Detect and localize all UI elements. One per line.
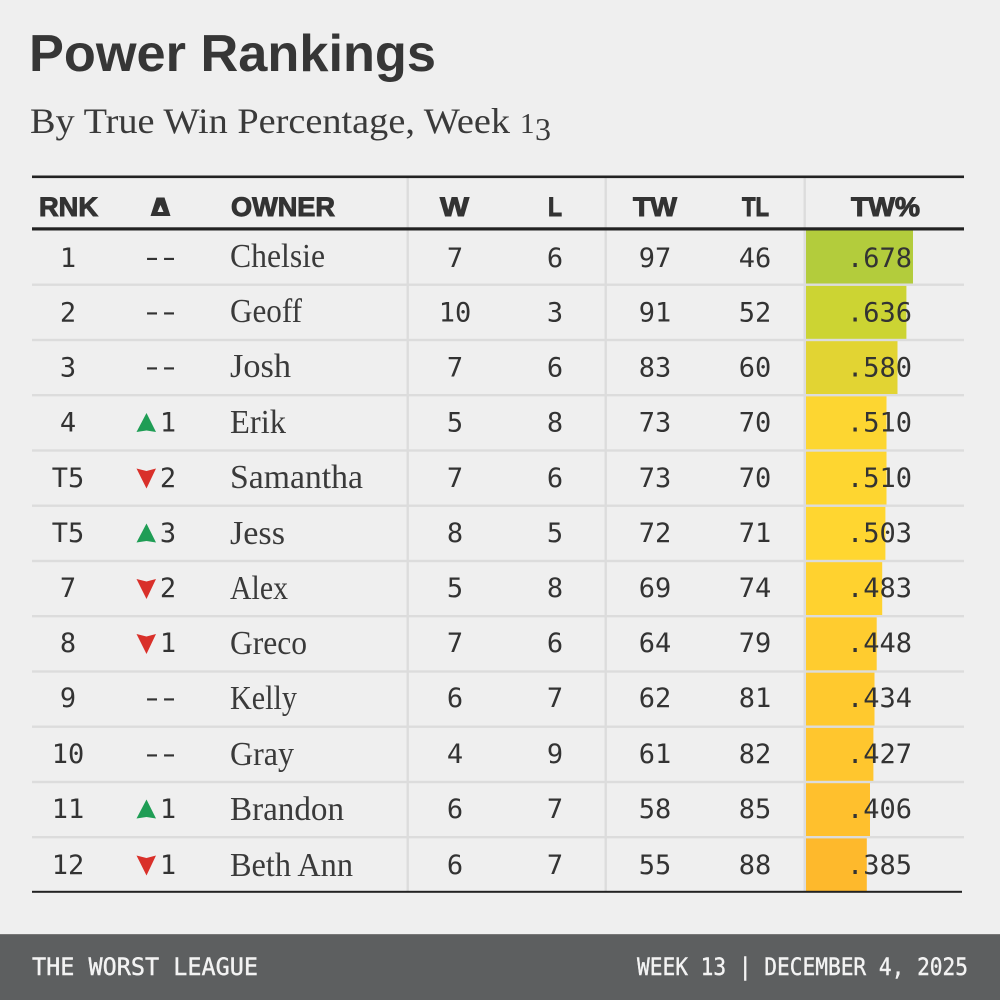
true win percentage column: .427 <box>847 739 912 770</box>
rank column: T5 <box>52 518 84 549</box>
true wins column: 69 <box>639 573 671 604</box>
wins column: 8 <box>447 518 463 549</box>
true wins column: 73 <box>639 408 671 438</box>
change column: 1 <box>160 850 176 881</box>
true wins column: 61 <box>639 739 671 770</box>
title: Power Rankings <box>29 25 436 83</box>
true losses column: 70 <box>739 408 771 438</box>
table header: TL <box>742 192 769 222</box>
true win percentage column: .406 <box>847 794 912 825</box>
wins column: 7 <box>447 352 463 384</box>
rank column: 10 <box>52 739 84 770</box>
change column: -- <box>140 738 175 769</box>
rank column <box>52 243 84 881</box>
wins column: 6 <box>447 850 463 881</box>
icon: delta header <box>150 198 170 216</box>
losses column: 5 <box>547 518 563 549</box>
true losses column: 46 <box>739 243 771 274</box>
losses column <box>547 243 563 881</box>
table header: OWNER <box>231 192 335 222</box>
losses column: 6 <box>547 243 563 274</box>
owner column: Beth Ann <box>230 847 353 884</box>
true win percentage column: .510 <box>847 408 912 438</box>
losses column: 7 <box>547 683 563 714</box>
table header: RNK <box>39 192 99 222</box>
change column: 2 <box>160 573 176 604</box>
subtitle: By True Win Percentage, Week <box>30 101 510 141</box>
wins column: 5 <box>447 408 463 438</box>
footer: league name: THE WORST LEAGUE <box>32 953 258 981</box>
true wins column: 64 <box>639 628 671 659</box>
rank column: 11 <box>52 794 84 825</box>
subtitle: 1 <box>520 108 534 140</box>
change column: -- <box>140 242 175 273</box>
rank column: 3 <box>60 352 76 384</box>
true losses column: 52 <box>739 298 771 328</box>
table header: TW% <box>851 192 920 222</box>
wins column: 5 <box>447 573 463 604</box>
wins column: 6 <box>447 794 463 825</box>
wins column: 10 <box>439 298 471 328</box>
table header: TW <box>633 192 678 222</box>
true win percentage column: .636 <box>847 298 912 328</box>
wins column: 7 <box>447 463 463 494</box>
icons: red down arrows <box>136 468 156 876</box>
change column: -- <box>140 296 175 327</box>
owner column: Erik <box>230 404 286 441</box>
change column: 1 <box>160 408 176 438</box>
true losses column: 82 <box>739 739 771 770</box>
true win percentage column: .580 <box>847 352 912 384</box>
true wins column: 73 <box>639 463 671 494</box>
rank column: 7 <box>60 573 76 604</box>
subtitle: 3 <box>535 111 551 147</box>
owner column: Gray <box>230 736 294 773</box>
losses column: 7 <box>547 850 563 881</box>
wins column: 7 <box>447 628 463 659</box>
owner column: Kelly <box>230 680 297 717</box>
owner column: Jess <box>230 515 285 552</box>
true wins column: 72 <box>639 518 671 549</box>
true losses column: 60 <box>739 352 771 384</box>
true win percentage column: .483 <box>847 573 912 604</box>
change column: 3 <box>160 518 176 549</box>
losses column: 8 <box>547 573 563 604</box>
change column: -- <box>140 682 175 713</box>
losses column: 7 <box>547 794 563 825</box>
change column: 1 <box>160 794 176 825</box>
losses column: 3 <box>547 298 563 328</box>
true losses column: 88 <box>739 850 771 881</box>
losses column: 6 <box>547 628 563 659</box>
true win percentage column: .678 <box>847 243 912 274</box>
true losses column: 81 <box>739 683 771 714</box>
icons: green up arrows <box>136 413 156 818</box>
rank column: 8 <box>60 628 76 659</box>
true wins column: 62 <box>639 683 671 714</box>
owner column: Chelsie <box>230 238 325 275</box>
owner column: Samantha <box>230 459 363 496</box>
change column: -- <box>140 351 175 382</box>
owner column: Josh <box>230 348 291 385</box>
losses column: 8 <box>547 408 563 438</box>
true losses column: 70 <box>739 463 771 494</box>
footer band <box>0 934 1000 1000</box>
change column: 1 <box>160 628 176 659</box>
wins column: 6 <box>447 683 463 714</box>
true wins column: 83 <box>639 352 671 384</box>
losses column: 6 <box>547 352 563 384</box>
true win percentage column: .503 <box>847 518 912 549</box>
true losses column: 79 <box>739 628 771 659</box>
change column <box>136 242 176 881</box>
win percentage bars <box>806 230 913 892</box>
true losses column: 71 <box>739 518 771 549</box>
table header: L <box>548 192 562 222</box>
owner column: Greco <box>230 625 307 662</box>
rank column: 4 <box>60 408 76 438</box>
owner column <box>230 238 363 884</box>
rank column: 1 <box>60 243 76 274</box>
wins column: 7 <box>447 243 463 274</box>
rank column: 9 <box>60 683 76 714</box>
true losses column: 85 <box>739 794 771 825</box>
true wins column <box>639 243 671 881</box>
losses column: 6 <box>547 463 563 494</box>
losses column: 9 <box>547 739 563 770</box>
true win percentage column <box>847 243 912 881</box>
true win percentage column: .434 <box>847 683 912 714</box>
true wins column: 91 <box>639 298 671 328</box>
wins column: 4 <box>447 739 463 770</box>
rank column: 12 <box>52 850 84 881</box>
true win percentage column: .385 <box>847 850 912 881</box>
table header: W <box>440 192 470 222</box>
owner column: Alex <box>230 570 288 607</box>
owner column: Brandon <box>230 791 344 828</box>
true wins column: 55 <box>639 850 671 881</box>
table header <box>39 192 920 222</box>
true losses column <box>739 243 771 881</box>
true wins column: 97 <box>639 243 671 274</box>
true losses column: 74 <box>739 573 771 604</box>
true wins column: 58 <box>639 794 671 825</box>
true win percentage column: .448 <box>847 628 912 659</box>
rank column: 2 <box>60 298 76 328</box>
wins column <box>439 243 471 881</box>
change column: 2 <box>160 463 176 494</box>
owner column: Geoff <box>230 293 303 330</box>
true win percentage column: .510 <box>847 463 912 494</box>
rank column: T5 <box>52 463 84 494</box>
